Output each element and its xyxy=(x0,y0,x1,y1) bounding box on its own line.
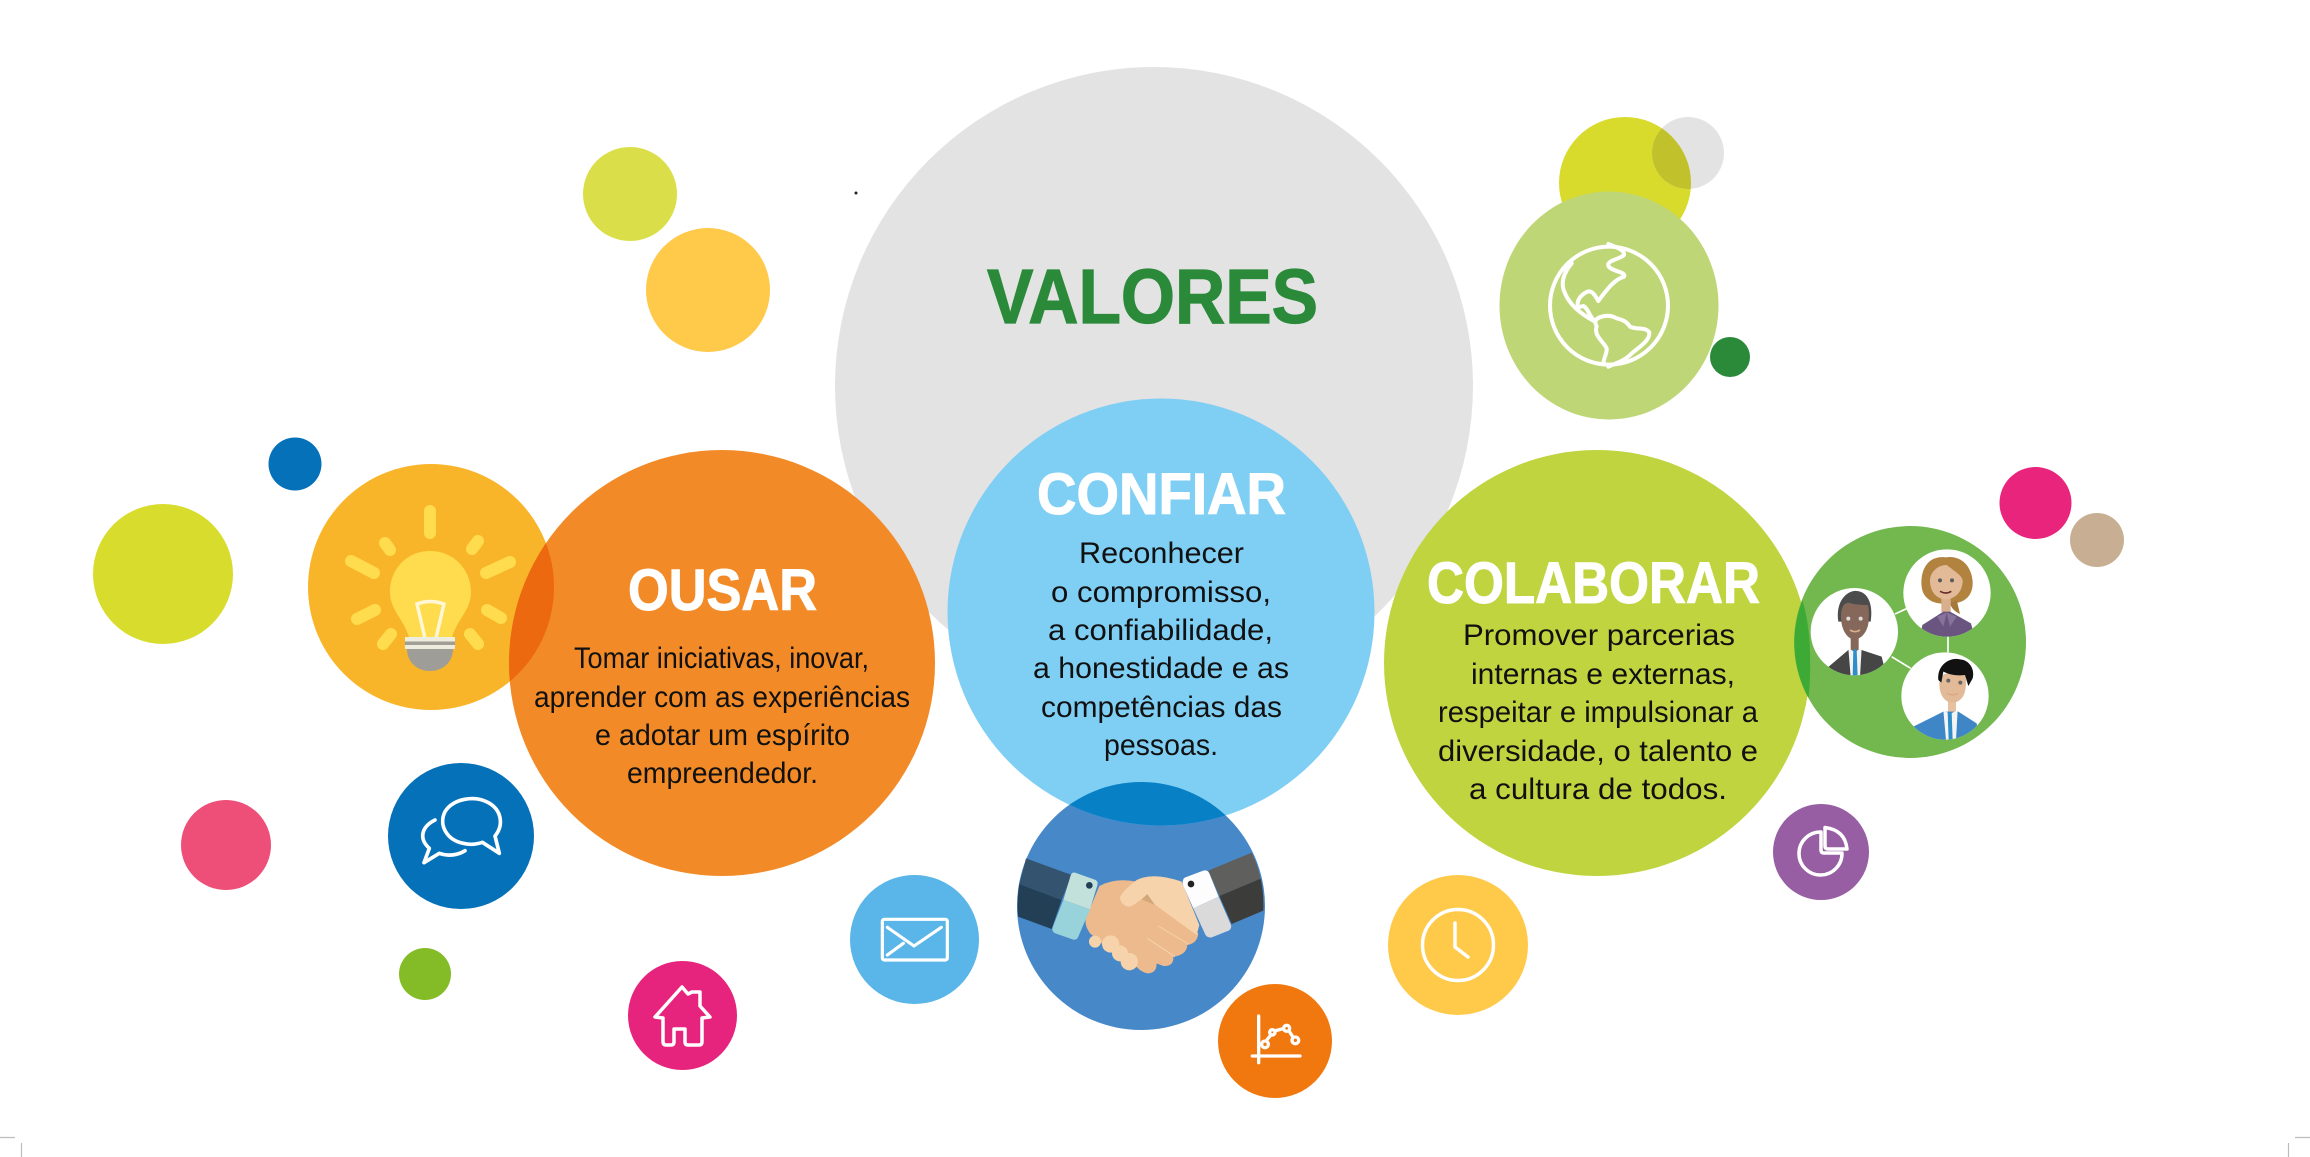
text: colaborar description: Promover parcerias xyxy=(1463,619,1735,652)
panel: confiar text xyxy=(1033,462,1289,762)
right hand xyxy=(1120,876,1199,935)
decorative dot: dark green xyxy=(1710,337,1750,377)
decorative dot: rose xyxy=(181,800,271,890)
text: ousar description: Tomar iniciativas, inovar, xyxy=(574,642,869,675)
decorative dot: lime small xyxy=(399,948,451,1000)
text: confiar description: o compromisso, xyxy=(1051,576,1271,609)
text: ousar description: aprender com as experiências xyxy=(534,681,910,714)
text: confiar description: a confiabilidade, xyxy=(1048,614,1273,647)
text: ousar description: empreendedor. xyxy=(627,757,818,790)
heading: VALORES: VALORES xyxy=(987,254,1318,340)
finger blobs xyxy=(1089,935,1138,970)
text: confiar description: pessoas. xyxy=(1104,729,1218,762)
text: confiar description: competências das xyxy=(1041,691,1282,724)
decorative dot: pink right xyxy=(2000,467,2072,539)
text: confiar description xyxy=(1033,537,1289,762)
icon: clock circle xyxy=(1388,875,1528,1015)
text: colaborar description: diversidade, o talento e xyxy=(1438,735,1758,768)
text: confiar description: a honestidade e as xyxy=(1033,652,1289,685)
decorative dot: grey overlapping yellow xyxy=(1652,117,1724,189)
heading: COLABORAR: COLABORAR xyxy=(1427,551,1760,616)
icon: chart circle xyxy=(1218,984,1332,1098)
text: confiar description: Reconhecer xyxy=(1079,537,1244,570)
right cuff xyxy=(1183,870,1219,908)
heading: CONFIAR: CONFIAR xyxy=(1037,462,1286,527)
right sleeve xyxy=(1208,853,1261,896)
decorative dot: pale lime left xyxy=(93,504,233,644)
icon: pie chart circle xyxy=(1773,804,1869,900)
avatar: left man xyxy=(1811,588,1898,677)
left sleeve xyxy=(1019,858,1072,900)
icon: chat circle xyxy=(388,763,534,909)
filament xyxy=(417,602,444,638)
left cuff xyxy=(1063,873,1098,909)
decorative dot: top lime xyxy=(583,147,677,241)
icon: people network circle xyxy=(1794,526,2026,758)
connectors xyxy=(1892,609,1948,668)
decorative dot: tan xyxy=(2070,513,2124,567)
avatar: bottom man xyxy=(1901,652,1989,743)
icon: light bulb circle xyxy=(308,464,554,710)
icon: globe circle xyxy=(1500,192,1718,420)
text: colaborar description: internas e externas, xyxy=(1471,658,1735,691)
bulb rays xyxy=(351,511,510,644)
heading: OUSAR: OUSAR xyxy=(628,558,817,623)
decorative dot: blue xyxy=(268,438,322,490)
crop marks xyxy=(0,1138,2310,1157)
panel: valores grey circle xyxy=(835,67,1473,705)
bulb glass xyxy=(390,551,471,637)
text: colaborar description: respeitar e impulsionar a xyxy=(1438,696,1758,729)
text: colaborar description xyxy=(1438,619,1758,806)
bulb base xyxy=(407,649,453,671)
text: ousar description xyxy=(534,642,910,790)
icon: home circle xyxy=(628,961,737,1070)
decorative dot: top yellow xyxy=(646,228,770,352)
icon: handshake circle xyxy=(948,398,1374,1030)
panel: ousar orange circle xyxy=(509,450,935,876)
text: ousar description: e adotar um espírito xyxy=(595,719,850,752)
icon: envelope circle xyxy=(850,875,979,1004)
avatar: woman xyxy=(1903,549,1991,638)
text: colaborar description: a cultura de todos. xyxy=(1469,773,1727,806)
panel: colaborar green circle xyxy=(1384,450,1810,876)
decorative dot: yellow behind globe xyxy=(1559,117,1691,249)
left hand xyxy=(1085,880,1198,973)
speck xyxy=(854,192,858,194)
